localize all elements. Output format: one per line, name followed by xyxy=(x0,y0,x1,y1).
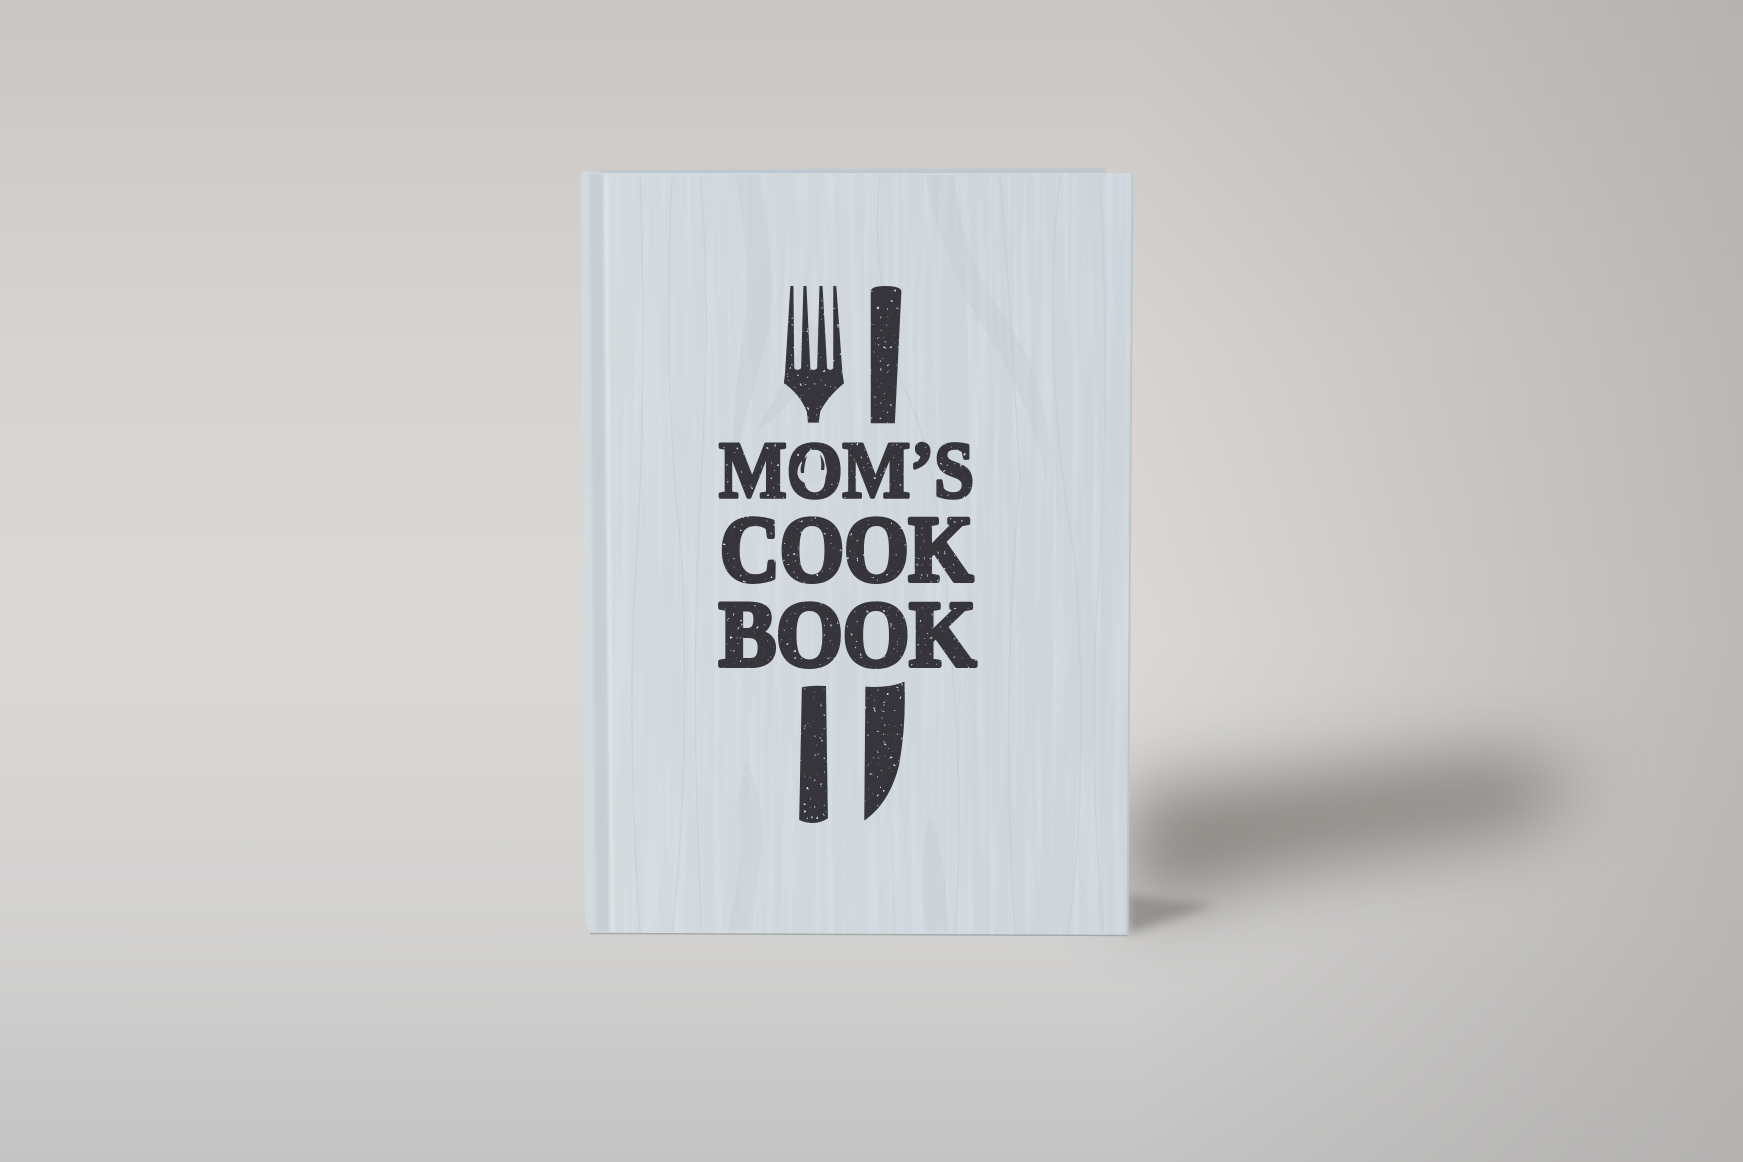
icon: knife blade xyxy=(864,682,905,821)
right side backdrop falloff xyxy=(1130,0,1743,1162)
bottom page edge xyxy=(590,934,1128,936)
book xyxy=(581,168,1135,940)
title line: BOOK: BOOK xyxy=(719,584,976,686)
back cover edge xyxy=(600,168,1106,175)
front cover xyxy=(605,173,1133,935)
icon: knife handle top xyxy=(871,286,901,423)
title line: MOM'S: MOM’S xyxy=(719,427,974,515)
spine fold groove xyxy=(589,174,612,931)
spine xyxy=(581,171,611,933)
cover artwork xyxy=(719,286,976,823)
title: MOM'S COOK BOOK xyxy=(719,427,976,686)
icon: knife handle bottom xyxy=(799,686,828,823)
right cover edge xyxy=(1128,174,1132,935)
cast shadow xyxy=(1128,755,1590,934)
title line: COOK: COOK xyxy=(720,498,973,602)
icon: flame inside O xyxy=(798,448,827,484)
icon: fork xyxy=(784,286,844,423)
wood grain texture xyxy=(632,175,1015,933)
